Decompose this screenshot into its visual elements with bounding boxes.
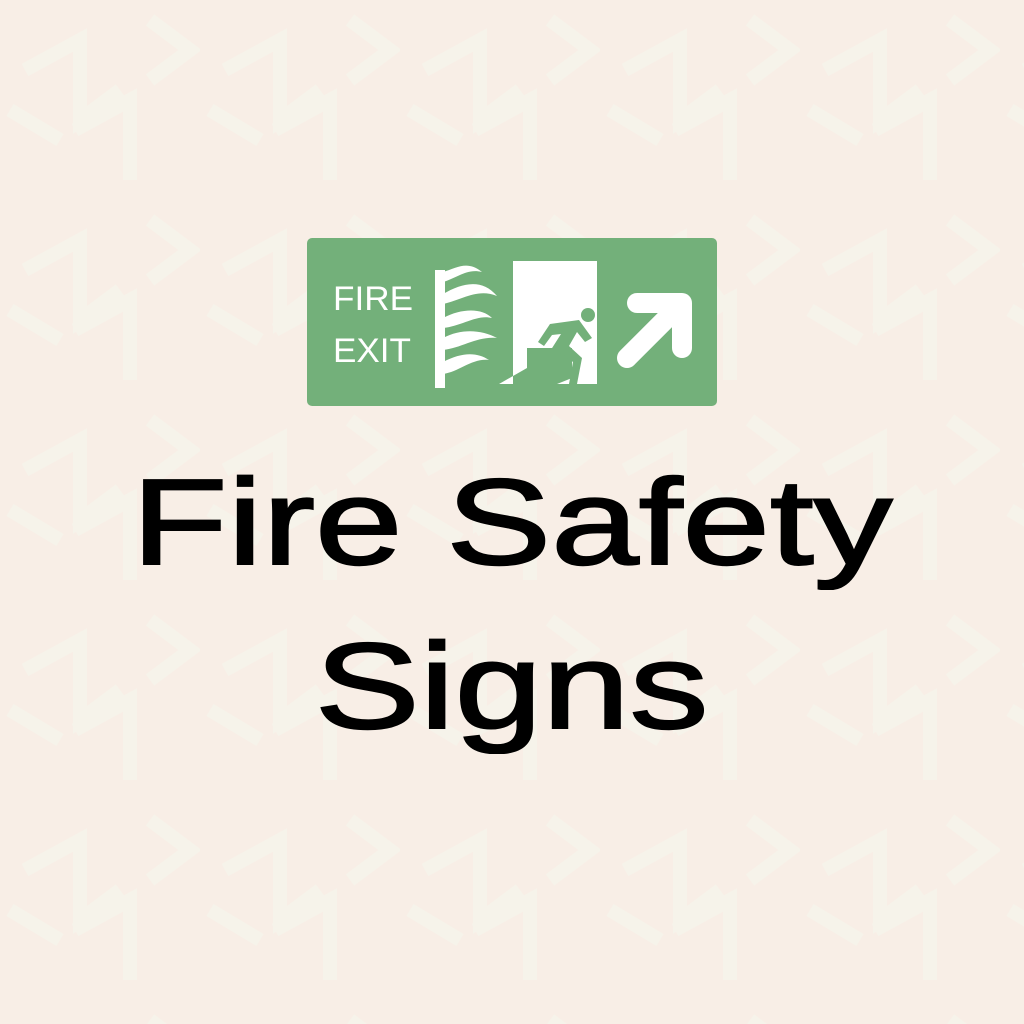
sign text: EXIT <box>333 332 411 370</box>
icon: arrow up-right <box>627 303 682 358</box>
sign text: FIRE <box>333 280 413 318</box>
icon: door with running man <box>499 261 597 384</box>
fire exit sign <box>307 238 717 406</box>
icon: flames <box>435 266 497 388</box>
sign text <box>333 280 413 370</box>
title: Fire Safety <box>132 454 892 590</box>
subtitle line: Signs <box>315 618 709 754</box>
